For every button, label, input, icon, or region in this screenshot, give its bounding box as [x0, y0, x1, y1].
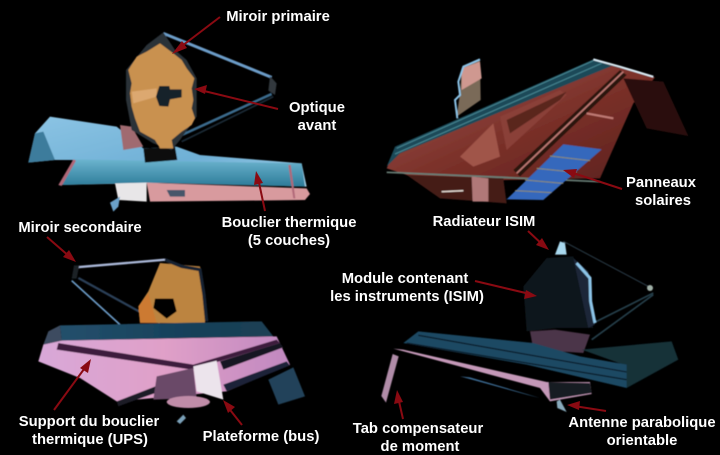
label: module ISIM: Module contenant: [342, 271, 468, 287]
label: antenne: orientable: [607, 433, 677, 449]
arrow: panneaux solaires: [563, 169, 622, 189]
arrow: plateforme: [223, 400, 242, 425]
bus: [153, 361, 223, 424]
backplane base: [120, 125, 143, 150]
label: optique avant: avant: [298, 118, 336, 134]
ISIM and mirror back: [523, 256, 595, 331]
illustration: telescope front view: [28, 32, 310, 212]
layered edge: [387, 59, 612, 167]
sunshield upper band: [60, 321, 273, 341]
label: tab compensateur: de moment: [381, 439, 460, 455]
moment trim tab: [381, 354, 399, 403]
rear solar panel: [623, 78, 688, 136]
label: miroir secondaire: Miroir secondaire: [18, 220, 142, 236]
arrow: tab compensateur: [394, 390, 403, 419]
primary mirror: [138, 260, 207, 323]
label: bouclier thermique: (5 couches): [248, 233, 330, 249]
detail: [460, 70, 627, 177]
spacecraft bus: [110, 183, 185, 212]
illustration: telescope rear view with radiators and solar array: [387, 59, 688, 203]
arrow: radiateur ISIM: [528, 231, 549, 250]
sunshield: [28, 117, 310, 202]
mirror frame: [126, 32, 197, 150]
label: plateforme: Plateforme (bus): [203, 429, 319, 445]
label: tab compensateur: Tab compensateur: [353, 421, 483, 437]
illustration: telescope side view: [381, 241, 678, 412]
aft optics: [156, 86, 182, 107]
base: [530, 330, 590, 353]
label: support du bouclier: thermique (UPS): [32, 432, 148, 448]
label: miroir primaire: Miroir primaire: [226, 9, 330, 25]
arrow: bouclier thermique: [254, 171, 265, 211]
arrow: miroir secondaire: [47, 237, 76, 262]
lower structure: [387, 172, 600, 203]
label: panneaux solaires: solaires: [635, 193, 691, 209]
secondary mirror struts: [72, 260, 165, 325]
label: module ISIM: les instruments (ISIM): [330, 289, 484, 305]
pink underside: [38, 336, 290, 401]
label: optique avant: Optique: [289, 100, 345, 116]
sunshield: [393, 331, 678, 401]
arrow: module ISIM: [475, 281, 537, 299]
main red sunshield: [387, 61, 655, 182]
solar panel: [268, 367, 305, 405]
primary mirror: [128, 43, 195, 148]
label: antenne: Antenne parabolique: [568, 415, 716, 431]
secondary mirror struts: [563, 241, 653, 340]
label: panneaux solaires: Panneaux: [626, 175, 697, 191]
illustration: telescope underside view: [38, 260, 305, 424]
arrow: optique avant: [194, 85, 278, 109]
radiator tip: [555, 241, 567, 255]
label: radiateur ISIM: Radiateur ISIM: [433, 214, 535, 230]
arrow: support du bouclier: [54, 359, 91, 410]
tower: [455, 59, 482, 118]
label: support du bouclier: Support du bouclier: [19, 414, 160, 430]
arrow: antenne: [567, 401, 606, 411]
arrow: miroir primaire: [172, 17, 220, 54]
solar panels: [507, 144, 602, 200]
label: bouclier thermique: Bouclier thermique: [222, 215, 356, 231]
secondary mirror support: [163, 33, 277, 142]
